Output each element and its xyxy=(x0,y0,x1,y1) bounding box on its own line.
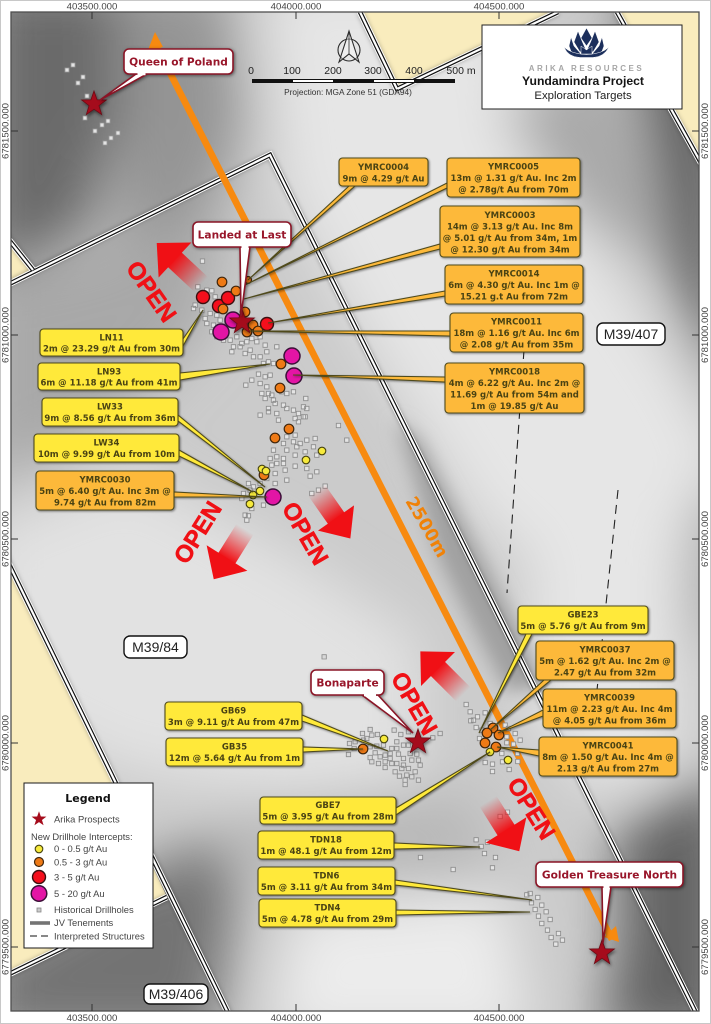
scale bar: 0 xyxy=(248,65,254,77)
top coordinate labels: 404000.000 xyxy=(271,2,321,12)
OPEN label: OPEN xyxy=(385,668,442,740)
callout: YMRC0003: @ 12.30 g/t Au from 34m xyxy=(450,246,570,256)
legend: Legend xyxy=(65,792,111,805)
legend star xyxy=(32,811,46,825)
callout: LN11: 2m @ 23.29 g/t Au from 30m xyxy=(43,344,180,354)
historical drillholes: TDN and Golden Treasure North xyxy=(418,810,565,946)
prospect star: Landed at Last xyxy=(230,309,254,333)
callout: LW34 xyxy=(34,434,253,492)
legend: 3 - 5 g/t Au xyxy=(54,872,99,882)
historical drillholes: Bonaparte cluster xyxy=(322,655,442,787)
callout: TDN6: 5m @ 3.11 g/t Au from 34m xyxy=(261,883,392,893)
callout: LN11: LN11 xyxy=(99,334,124,344)
callout: TDN4: 5m @ 4.78 g/t Au from 29m xyxy=(262,915,393,925)
right coordinate labels: 6781000.000 xyxy=(700,307,711,363)
callout: GB35 xyxy=(166,738,363,766)
callout: GBE7: 5m @ 3.95 g/t Au from 28m xyxy=(262,812,394,822)
legend: 5 - 20 g/t Au xyxy=(54,888,105,899)
callout: YMRC0004: YMRC0004 xyxy=(357,163,409,173)
legend: Historical Drillholes xyxy=(54,904,134,915)
bottom coordinate labels: 403500.000 xyxy=(67,1013,117,1024)
title box: Exploration Targets xyxy=(534,90,632,102)
left coordinate labels: 6781000.000 xyxy=(0,307,12,363)
orange 2500m arrow xyxy=(148,32,619,942)
callout: YMRC0014: 6m @ 4.30 g/t Au. Inc 1m @ xyxy=(448,281,580,291)
right coordinate labels: 6780500.000 xyxy=(700,511,711,567)
callout: GB35: 12m @ 5.64 g/t Au from 1m xyxy=(169,754,300,764)
site label: Queen of Poland xyxy=(100,49,233,100)
callout: YMRC0030: YMRC0030 xyxy=(78,476,131,486)
callout: YMRC0005: @ 2.78g/t Au from 70m xyxy=(458,186,569,196)
scale bar xyxy=(248,65,476,97)
callout: YMRC0030 xyxy=(36,471,267,510)
OPEN label: OPEN xyxy=(120,256,181,327)
legend: Arika Prospects xyxy=(54,814,120,824)
top coordinate labels xyxy=(67,2,524,12)
callout: YMRC0003: @ 5.01 g/t Au from 34m, 1m xyxy=(443,234,577,244)
tenement label M39/407: M39/407 xyxy=(604,326,658,342)
OPEN arrow lower right xyxy=(480,798,526,852)
scale bar: 400 xyxy=(405,65,423,77)
OPEN arrow near Bonaparte xyxy=(420,651,469,700)
OPEN arrow north-west of Landed at Last xyxy=(156,242,206,290)
prospect star: Bonaparte xyxy=(406,729,430,753)
OPEN arrow south-east xyxy=(310,486,354,538)
callout: YMRC0039: YMRC0039 xyxy=(583,694,635,704)
tenement label M39/84: M39/84 xyxy=(132,639,179,655)
left coordinate labels: 6779500.000 xyxy=(0,919,12,975)
callout: LW34: LW34 xyxy=(94,438,120,448)
callout: GB35: GB35 xyxy=(222,742,247,752)
callout: LW33: LW33 xyxy=(97,402,123,412)
site label: Bonaparte xyxy=(311,670,413,733)
callout: YMRC0018: 1m @ 19.85 g/t Au xyxy=(471,402,558,412)
callout: TDN6 xyxy=(258,867,532,900)
callout: GBE23 xyxy=(479,606,648,733)
callout: YMRC0014 xyxy=(268,265,583,323)
tenement label M39/407 xyxy=(597,323,665,345)
left coordinate labels: 6781500.000 xyxy=(0,103,12,159)
callout: YMRC0018: 4m @ 6.22 g/t Au. Inc 2m @ xyxy=(449,379,580,389)
legend xyxy=(24,783,153,948)
callout: GBE23: GBE23 xyxy=(567,610,599,620)
site label: Landed at Last xyxy=(193,222,291,316)
callout: YMRC0004: 9m @ 4.29 g/t Au xyxy=(343,174,424,184)
callout: YMRC0041: YMRC0041 xyxy=(581,742,634,752)
left coordinate labels: 6780000.000 xyxy=(0,715,12,771)
scale bar: Projection: MGA Zone 51 (GDA94) xyxy=(284,87,412,97)
callout: TDN18: 1m @ 48.1 g/t Au from 12m xyxy=(260,847,392,857)
right coordinate labels: 6781500.000 xyxy=(700,103,711,159)
callout: YMRC0005 xyxy=(245,158,580,285)
callout: YMRC0005: 13m @ 1.31 g/t Au. Inc 2m xyxy=(450,174,577,184)
site label: Bonaparte: Bonaparte xyxy=(316,678,379,690)
callout: LW34: 10m @ 9.99 g/t Au from 10m xyxy=(38,450,175,460)
callout: YMRC0041: 8m @ 1.50 g/t Au. Inc 4m @ xyxy=(542,753,674,763)
callout: YMRC0039: @ 4.05 g/t Au from 36m xyxy=(553,716,666,726)
callout: YMRC0039 xyxy=(498,689,676,733)
callout: YMRC0011: @ 2.08 g/t Au from 35m xyxy=(460,340,573,350)
scale bar: 100 xyxy=(283,65,301,77)
left coordinate labels xyxy=(0,103,12,975)
icon: Arika lotus logo xyxy=(564,28,609,58)
scale bar: 300 xyxy=(364,65,382,77)
callout: LN93: LN93 xyxy=(97,368,121,378)
callout: GB69 xyxy=(165,702,388,751)
callout: YMRC0030: 5m @ 6.40 g/t Au. Inc 3m @ xyxy=(39,487,171,497)
callout: TDN18 xyxy=(258,831,480,859)
callout: YMRC0004 xyxy=(248,158,428,280)
callout: YMRC0003: YMRC0003 xyxy=(483,211,536,221)
callout: LN93 xyxy=(38,363,270,390)
legend: New Drillhole Intercepts: xyxy=(31,831,133,842)
icon: north arrow xyxy=(338,31,360,62)
callout: YMRC0005: YMRC0005 xyxy=(487,162,539,172)
callout: GBE7: GBE7 xyxy=(315,801,341,811)
new drillhole intercepts: yellow 0-0.5 g/t xyxy=(246,447,512,764)
OPEN label: OPEN xyxy=(501,773,560,845)
callout: TDN4 xyxy=(259,899,530,927)
callout: YMRC0037: 5m @ 1.62 g/t Au. Inc 2m @ xyxy=(539,657,671,667)
legend: JV Tenements xyxy=(54,917,114,928)
bottom coordinate labels: 404500.000 xyxy=(474,1013,524,1024)
tenement label M39/84 xyxy=(124,636,187,658)
callout: TDN6: TDN6 xyxy=(314,872,340,882)
site label: Golden Treasure North xyxy=(536,862,683,943)
callout: YMRC0011 xyxy=(248,313,583,352)
site label: Landed at Last: Landed at Last xyxy=(198,230,286,242)
tenement label M39/406 xyxy=(144,984,208,1004)
new drillhole intercepts: red 3-5 g/t xyxy=(196,290,274,330)
legend: 0.5 - 3 g/t Au xyxy=(54,856,107,868)
site label: Golden Treasure North: Golden Treasure North xyxy=(542,870,677,882)
callout: YMRC0003 xyxy=(244,206,580,299)
legend: 0 - 0.5 g/t Au xyxy=(54,843,107,854)
callout: GB69: GB69 xyxy=(221,706,246,716)
bottom coordinate labels: 404000.000 xyxy=(271,1013,321,1024)
callout: TDN18: TDN18 xyxy=(310,836,342,846)
title box xyxy=(482,25,682,109)
OPEN label: OPEN xyxy=(276,498,333,570)
historical drillholes: Landed at Last to LW cluster xyxy=(191,259,349,522)
callout: YMRC0041 xyxy=(497,737,677,776)
historical drillholes: Queen of Poland xyxy=(65,63,120,145)
callout: LW33: 9m @ 8.56 g/t Au from 36m xyxy=(44,414,176,424)
callout: TDN4: TDN4 xyxy=(315,904,341,914)
callout: LN11 xyxy=(40,310,203,356)
title box: ARIKA RESOURCES xyxy=(529,64,644,73)
callout: YMRC0011: YMRC0011 xyxy=(490,318,542,328)
top coordinate labels: 404500.000 xyxy=(474,2,524,12)
new drillhole intercepts: orange 0.5-3 g/t xyxy=(217,276,504,754)
tenement label M39/406: M39/406 xyxy=(149,986,203,1002)
new drillhole intercepts: magenta 5-20 g/t xyxy=(213,312,302,505)
site label: Queen of Poland: Queen of Poland xyxy=(129,56,228,68)
interpreted structures xyxy=(507,350,618,690)
right coordinate labels: 6779500.000 xyxy=(700,919,711,975)
callout: YMRC0014: 15.21 g.t Au from 72m xyxy=(460,292,568,302)
callout: YMRC0037: 2.47 g/t Au from 32m xyxy=(554,668,656,678)
callout: YMRC0011: 18m @ 1.16 g/t Au. Inc 6m xyxy=(453,329,580,339)
callout: GBE23: 5m @ 5.76 g/t Au from 9m xyxy=(520,622,646,632)
callout: GBE7 xyxy=(260,752,490,824)
label: 2500m: 2500m xyxy=(401,494,452,561)
callout: YMRC0018: 11.69 g/t Au from 54m and xyxy=(450,390,579,400)
scale bar: 200 xyxy=(324,65,342,77)
left coordinate labels: 6780500.000 xyxy=(0,511,12,567)
callout: YMRC0018 xyxy=(293,363,584,413)
OPEN arrow south-west xyxy=(206,526,252,580)
right coordinate labels xyxy=(700,103,711,975)
callout: YMRC0037: YMRC0037 xyxy=(578,646,631,656)
callout: YMRC0014: YMRC0014 xyxy=(487,270,540,280)
callout: LW33 xyxy=(42,398,265,487)
callout: YMRC0041: 2.13 g/t Au from 27m xyxy=(557,764,659,774)
historical drillholes: GBE cluster xyxy=(464,702,522,774)
callout: LN93: 6m @ 11.18 g/t Au from 41m xyxy=(40,378,178,388)
top coordinate labels: 403500.000 xyxy=(67,2,117,12)
right coordinate labels: 6780000.000 xyxy=(700,715,711,771)
legend: Interpreted Structures xyxy=(54,930,145,942)
callout: YMRC0018: YMRC0018 xyxy=(488,368,540,378)
callout: GB69: 3m @ 9.11 g/t Au from 47m xyxy=(168,718,299,728)
OPEN label: OPEN xyxy=(169,497,228,569)
callout: YMRC0039: 11m @ 2.23 g/t Au. Inc 4m xyxy=(546,705,673,715)
prospect star: Golden Treasure North xyxy=(590,940,614,964)
prospect star: Queen of Poland xyxy=(82,91,106,115)
bottom coordinate labels xyxy=(67,1013,524,1024)
callout: YMRC0003: 14m @ 3.13 g/t Au. Inc 8m xyxy=(447,222,573,232)
callout: YMRC0037 xyxy=(490,641,674,730)
callout: YMRC0030: 9.74 g/t Au from 82m xyxy=(54,498,156,508)
title box: Yundamindra Project xyxy=(522,74,644,88)
scale bar: 500 m xyxy=(446,65,476,77)
